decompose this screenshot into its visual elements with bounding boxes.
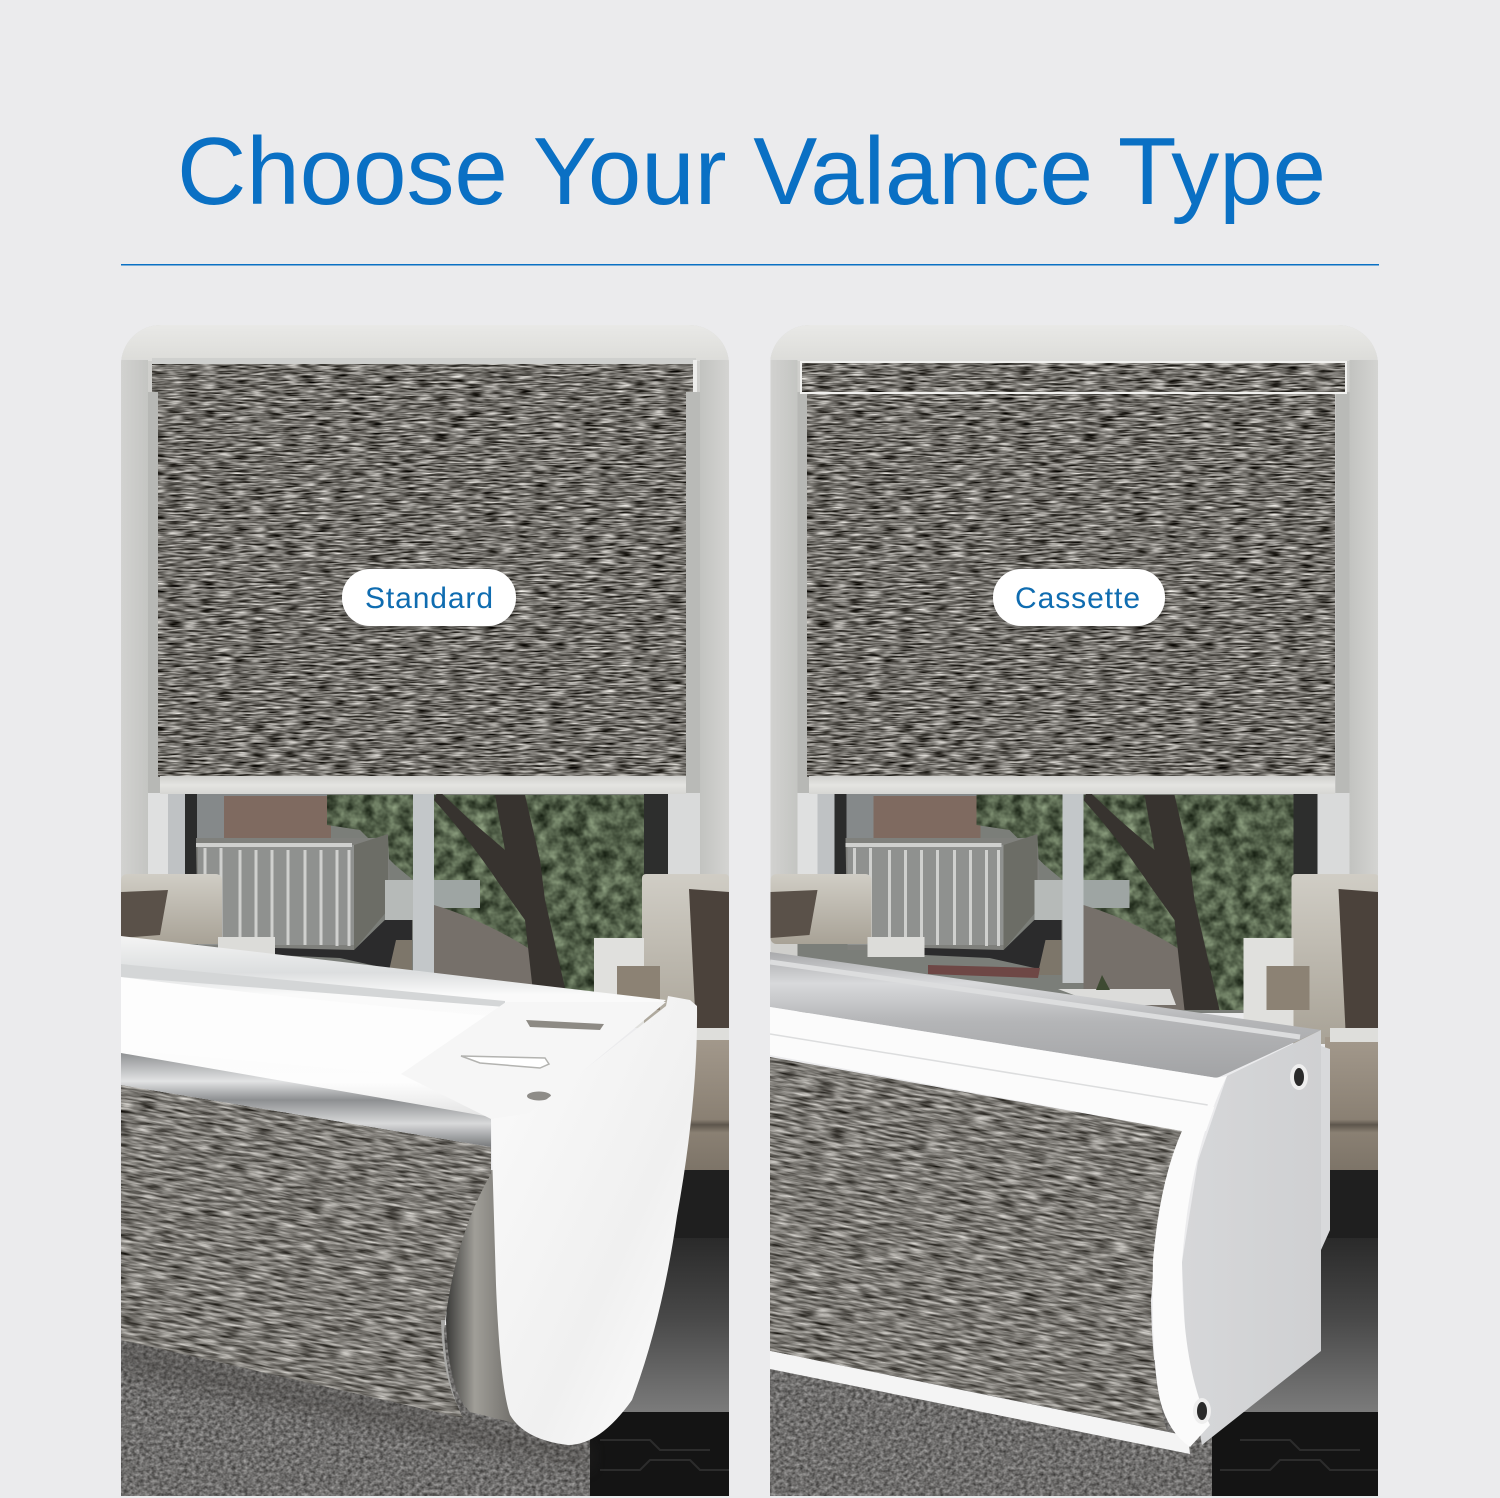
panel: cassette valance bbox=[770, 325, 1378, 1496]
closeup: cassette fabric face bbox=[770, 1057, 1182, 1430]
shade fabric bbox=[158, 392, 686, 794]
panel: standard valance bbox=[121, 325, 729, 1496]
closeup: silver top rail bbox=[770, 952, 1321, 1078]
shade fabric bbox=[807, 392, 1335, 794]
closeup: bottom screw bbox=[1193, 1398, 1211, 1424]
room foreground, sofa and table bbox=[1210, 1028, 1378, 1498]
label pill: standard bbox=[342, 569, 516, 626]
closeup: lower shade fabric bbox=[121, 1325, 590, 1498]
title: Choose Your Valance Type bbox=[177, 118, 1326, 225]
cassette headrail bbox=[801, 362, 1346, 393]
closeup: white rail bbox=[121, 936, 666, 1119]
closeup: mounting plate with slots bbox=[460, 1002, 666, 1119]
closeup: white valance strip bbox=[770, 1007, 1217, 1131]
room foreground, sofa and table bbox=[590, 1028, 729, 1498]
window room scene bbox=[121, 325, 729, 1044]
window room scene bbox=[770, 325, 1378, 1044]
label pill: cassette: Cassette bbox=[1015, 582, 1140, 615]
closeup: fabric roll bbox=[121, 1085, 491, 1418]
closeup: end cap bbox=[491, 996, 697, 1445]
closeup: silver rods bbox=[121, 1053, 491, 1147]
background details: table, plant, roof bbox=[928, 965, 1176, 1005]
closeup: white bottom strip bbox=[770, 1351, 1190, 1454]
closeup: metal roller hub bbox=[446, 1170, 518, 1424]
label pill: standard: Standard bbox=[365, 582, 493, 615]
closeup: lower shade fabric bbox=[770, 1360, 1212, 1498]
closeup: end cap bbox=[1153, 1030, 1330, 1447]
closeup: top screw bbox=[1290, 1064, 1308, 1090]
label pill: cassette bbox=[993, 569, 1165, 626]
standard headrail bbox=[152, 358, 697, 392]
